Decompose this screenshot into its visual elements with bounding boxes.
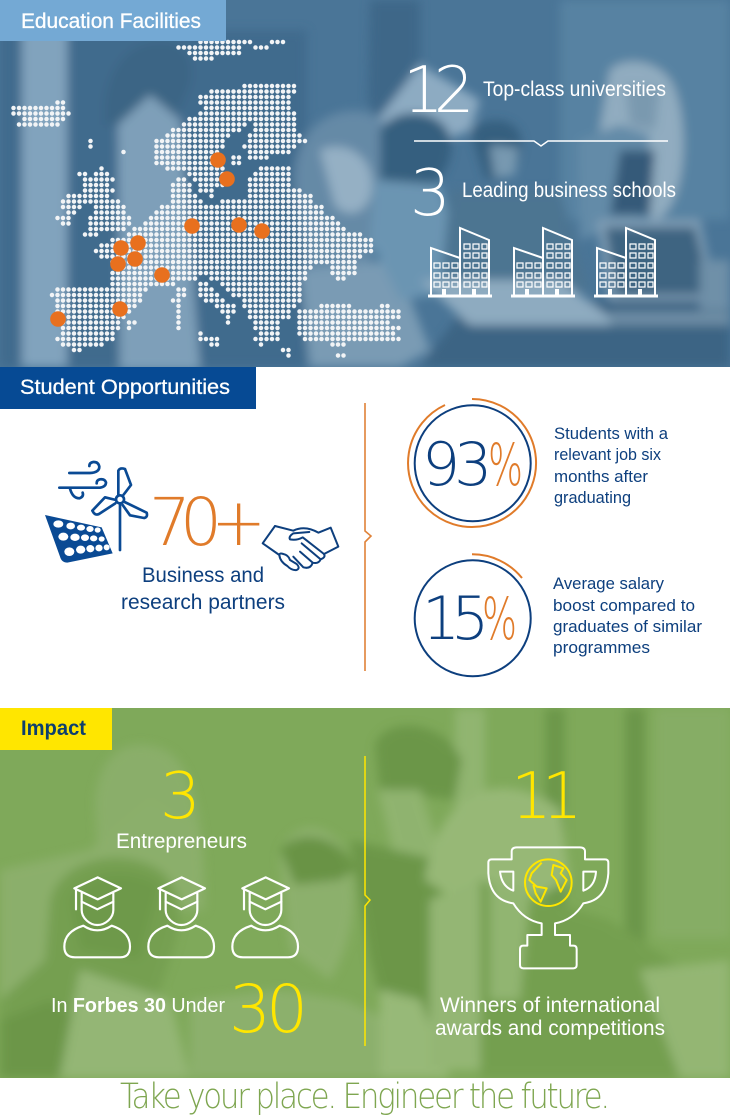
panel: student opportunities — [0, 367, 730, 708]
text: relevant job — [554, 424, 669, 507]
text: business and research partners — [121, 564, 285, 614]
stat: 12 universities: 12 — [403, 54, 469, 128]
stat: 3 business schools — [410, 157, 676, 231]
heading: student opportunities: Student Opportunities — [20, 376, 230, 399]
stat: 3 entrepreneurs — [116, 760, 247, 853]
text: relevant job: Students with a — [554, 424, 669, 443]
chart: 15 percent ring: 15 — [422, 584, 483, 654]
text: business and research partners: Business and — [142, 564, 264, 587]
text: business and research partners: research partners — [121, 591, 285, 614]
chart: 93 percent ring — [408, 399, 536, 527]
panel: impact — [0, 708, 730, 1078]
text: salary boost — [553, 574, 702, 657]
stat: 3 entrepreneurs: 3 — [160, 760, 201, 834]
text: relevant job: months after — [554, 467, 648, 486]
chart: 93 percent ring: % — [488, 431, 523, 499]
text: relevant job: graduating — [554, 488, 631, 507]
panel: education facilities — [0, 0, 730, 370]
text: salary boost: Average salary — [553, 574, 664, 593]
icon: trophy with globe — [488, 847, 608, 968]
text: salary boost: boost compared to — [553, 596, 695, 615]
stat: forbes 30 under 30: In Forbes 30 Under — [51, 995, 225, 1017]
icon: three buildings — [428, 228, 658, 296]
stat: 11: 11 — [511, 760, 576, 834]
map markers: university locations — [50, 152, 270, 327]
stat: 3 entrepreneurs: Entrepreneurs — [116, 830, 247, 853]
icon: three graduates — [64, 877, 298, 957]
map of Europe — [14, 42, 399, 356]
text: winners of international awards — [435, 994, 665, 1040]
text: relevant job: relevant job six — [554, 445, 661, 464]
chart: 15 percent ring — [415, 554, 531, 676]
stat: 12 universities: Top-class universities — [483, 78, 666, 101]
icon: handshake — [263, 526, 338, 570]
stat: 70+ partners: 70+ — [149, 484, 260, 561]
heading: education facilities — [0, 0, 226, 41]
chart: 93 percent ring: 93 — [422, 430, 486, 500]
chart: 15 percent ring: % — [482, 585, 517, 653]
background photo: students around a table — [0, 708, 730, 1078]
text: salary boost: graduates of similar — [553, 617, 702, 636]
heading: education facilities: Education Facilities — [21, 10, 201, 33]
heading: impact — [0, 708, 112, 750]
heading: impact: Impact — [21, 717, 86, 740]
text: salary boost: programmes — [553, 638, 650, 657]
stat: forbes 30 under 30: 30 — [229, 971, 303, 1048]
heading: student opportunities — [0, 367, 256, 409]
background photo: classroom — [0, 0, 730, 370]
text: winners of international awards: awards and competitions — [435, 1017, 665, 1040]
stat: 3 business schools: Leading business schools — [462, 179, 676, 202]
stat: 12 universities — [403, 54, 666, 128]
icon: wind turbine and solar panel — [45, 462, 147, 563]
stat: forbes 30 under 30 — [51, 971, 303, 1048]
stat: 3 business schools: 3 — [410, 157, 451, 231]
text: winners of international awards: Winners of international — [440, 994, 660, 1017]
